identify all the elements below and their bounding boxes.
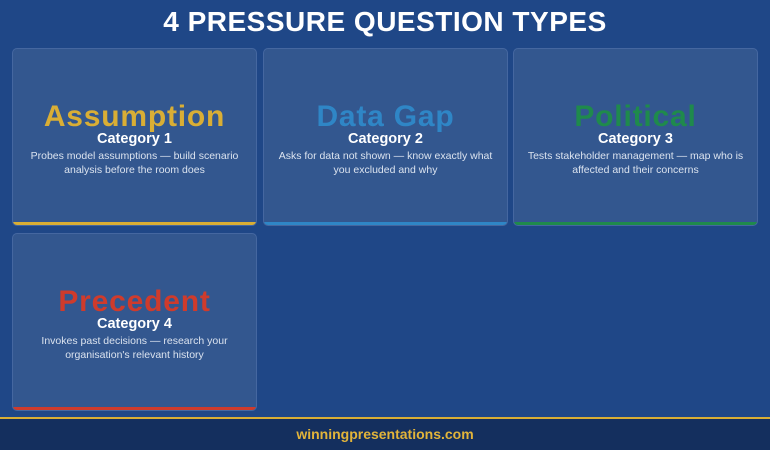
panel: political <box>513 48 758 226</box>
heading: political: Political <box>574 100 697 133</box>
category 4: Category 4 <box>97 316 172 332</box>
description 2: Asks for data not shown — know exactly what you excluded and why <box>279 150 492 176</box>
category 3: Category 3 <box>598 131 673 147</box>
footer: winningpresentations.com <box>296 426 474 442</box>
footer <box>0 417 770 450</box>
category 2: Category 2 <box>348 131 423 147</box>
panel: data gap <box>263 48 508 226</box>
title: 4 PRESSURE QUESTION TYPES <box>163 6 607 37</box>
heading: assumption: Assumption <box>44 100 225 133</box>
panel: assumption <box>12 48 257 226</box>
description 1: Probes model assumptions — build scenario analysis before the room does <box>31 150 238 176</box>
description 4: Invokes past decisions — research your organisation's relevant history <box>41 335 228 361</box>
description 3: Tests stakeholder management — map who is affected and their concerns <box>528 150 743 176</box>
heading: precedent: Precedent <box>58 285 211 318</box>
panel: precedent <box>12 233 257 411</box>
category 1: Category 1 <box>97 131 172 147</box>
heading: data gap: Data Gap <box>316 100 455 133</box>
